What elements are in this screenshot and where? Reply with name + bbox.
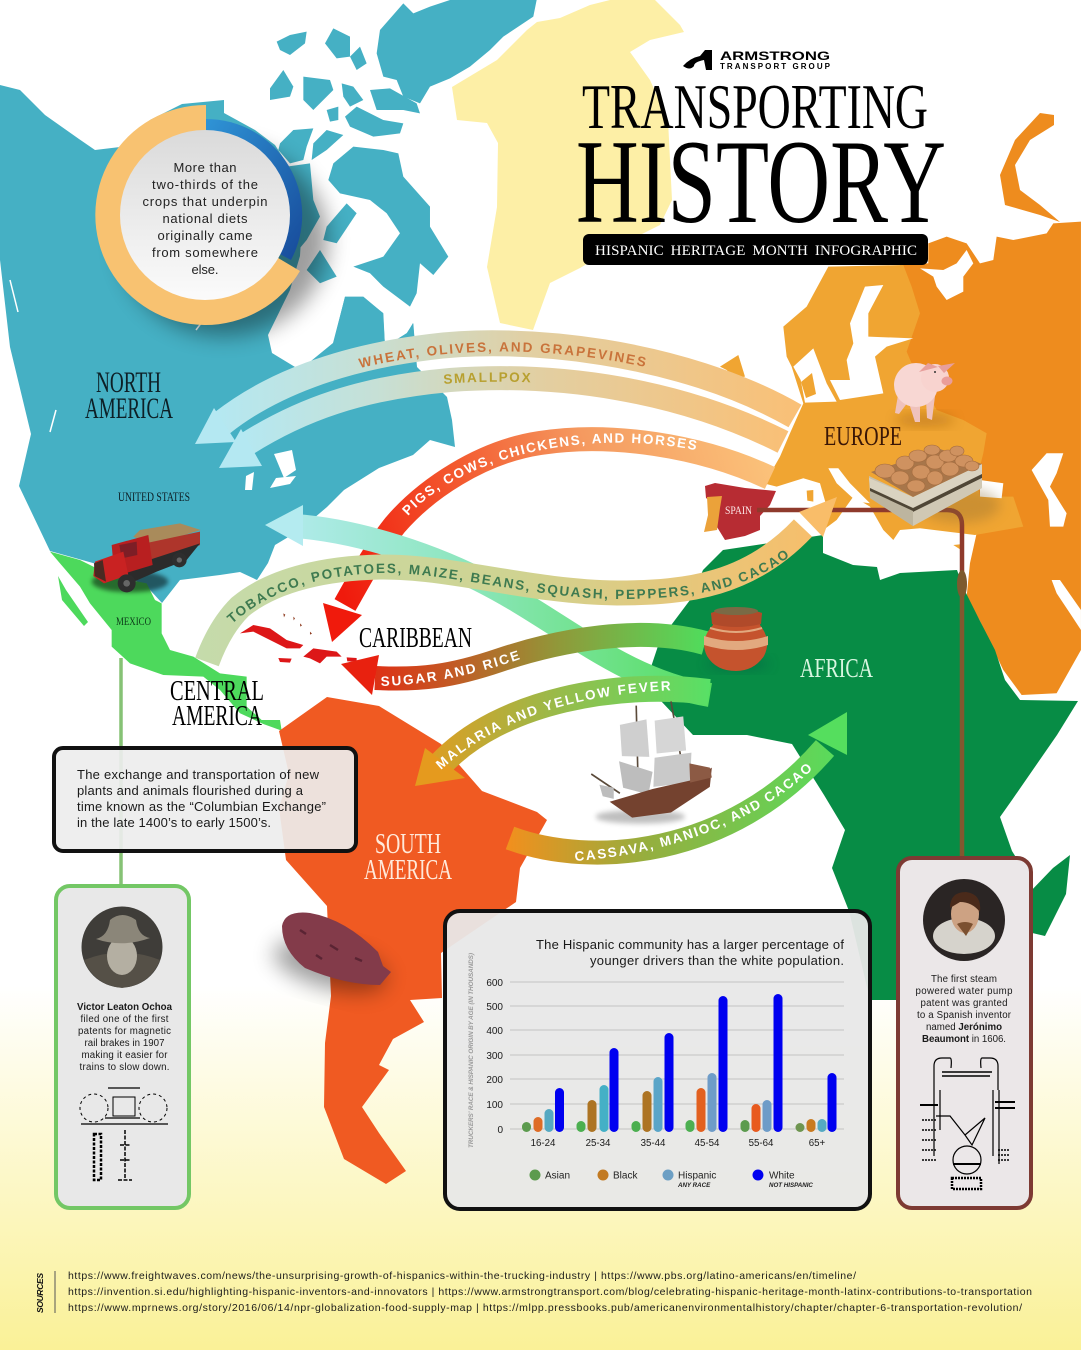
map: Mexico and Central America	[50, 552, 282, 731]
arrow: cassava, manioc and cacao	[506, 712, 847, 865]
arrow: sugar and rice: SUGAR AND RICE	[381, 650, 520, 686]
map: Caribbean islands	[240, 613, 357, 663]
bio text: powered water pump	[916, 986, 1012, 997]
connector: Mexico to Ochoa card	[119, 658, 123, 886]
bar chart: 35-44	[641, 1138, 666, 1149]
illustration: galleon ship	[591, 701, 712, 824]
arrow: pigs, cows, chickens and horses: PIGS, COWS, CHICKENS, AND HORSES	[402, 433, 696, 516]
map: Spain and Portugal	[704, 483, 776, 540]
sources: https://www.freightwaves.com/news/the-unsurprising-growth-of-hispanics-within-the-trucking-industry | https://www.pbs.org/latino-americans/en/timeline/	[68, 1270, 856, 1282]
map: South America	[279, 697, 547, 1184]
panel: Columbian Exchange: plants and animals flourished during a	[77, 783, 304, 798]
callout: two-thirds crops donut: More than	[174, 160, 236, 175]
callout: two-thirds crops donut: originally came	[158, 228, 252, 243]
callout: two-thirds crops donut: two-thirds of the	[152, 177, 258, 192]
logo: Armstrong Transport Group	[683, 50, 831, 71]
panel: Columbian Exchange: in the late 1400’s to early 1500’s.	[77, 815, 271, 830]
label: Spain: SPAIN	[725, 503, 752, 517]
bio text: Victor Leaton Ochoa	[77, 1002, 173, 1013]
callout: two-thirds crops donut: national diets	[162, 211, 248, 226]
chart legend: ANY RACE	[677, 1182, 711, 1189]
portrait: Victor Leaton Ochoa	[82, 906, 162, 988]
label: Europe: EUROPE	[824, 421, 902, 451]
map: Europe	[720, 265, 1023, 549]
chart heading: younger drivers than the white population.	[590, 953, 844, 968]
bio text: Beaumont in 1606.	[922, 1034, 1006, 1045]
label: Mexico: MEXICO	[116, 614, 151, 628]
illustration: cacao pod	[268, 913, 392, 1002]
bar chart: 600	[486, 978, 503, 989]
connector: Spain to Beaumont card	[757, 510, 967, 857]
arrow: malaria and yellow fever	[415, 676, 711, 786]
arrow: sugar and rice	[341, 622, 708, 695]
chart heading	[536, 937, 844, 968]
panel: trucker demographics chart	[445, 911, 870, 1209]
bio text: filed one of the first	[80, 1014, 169, 1025]
chart legend	[530, 1170, 813, 1189]
callout: two-thirds crops donut: crops that underpin	[142, 194, 268, 209]
sources	[35, 1270, 1032, 1314]
panel: Columbian Exchange	[54, 748, 356, 851]
sources: https://invention.si.edu/highlighting-hispanic-inventors-and-innovators | https://www.armstrongtransport.com/blog/celebrating-hispanic-heritage-month-latinx-contributions-to-transportation	[68, 1286, 1032, 1298]
axis title: TRUCKERS’ RACE & HISPANIC ORIGIN BY AGE (IN THOUSANDS)	[468, 953, 475, 1148]
chart heading: The Hispanic community has a larger percentage of	[536, 937, 844, 952]
title: HISTORY	[576, 115, 946, 248]
callout: two-thirds crops donut: else.	[192, 262, 218, 277]
map: Baltic and inland seas	[793, 250, 1081, 630]
patent drawing: steam water pump	[920, 1058, 1015, 1189]
arrow: pigs, cows, chickens and horses	[323, 427, 775, 642]
map: Madagascar	[1028, 855, 1070, 936]
label: South America: AMERICA	[364, 855, 453, 886]
arrow: wheat, olives and grapevines	[195, 330, 802, 444]
bar chart: 300	[486, 1051, 503, 1062]
label: North America	[85, 366, 173, 425]
bio text	[916, 974, 1012, 1045]
subtitle banner	[583, 234, 928, 265]
bar chart: 200	[486, 1075, 503, 1086]
illustration: clay pot	[704, 607, 770, 671]
label: Central America	[170, 676, 264, 732]
subtitle banner: HISPANIC HERITAGE MONTH INFOGRAPHIC	[595, 243, 917, 259]
bio text: making it easier for	[82, 1050, 168, 1061]
arrow: tobacco, potatoes, maize, beans, squash, peppers and cacao	[195, 497, 837, 666]
bar chart: 0	[497, 1125, 503, 1136]
bar chart: 400	[486, 1026, 503, 1037]
label: Africa: AFRICA	[800, 653, 873, 683]
bio text: patents for magnetic	[78, 1026, 171, 1037]
logo: Armstrong Transport Group: ARMSTRONG	[720, 51, 830, 63]
arrow: smallpox: SMALLPOX	[444, 372, 530, 384]
arrow: smallpox	[219, 366, 788, 468]
arrow: wheat, olives and grapevines: WHEAT, OLIVES, AND GRAPEVINES	[358, 342, 646, 368]
map: Africa	[650, 535, 1078, 1000]
title	[576, 71, 946, 248]
callout: two-thirds crops donut: from somewhere	[152, 245, 258, 260]
illustration: red truck	[92, 523, 201, 592]
title: TRANSPORTING	[582, 71, 928, 142]
bio text: patent was granted	[920, 998, 1008, 1009]
panel: Victor Leaton Ochoa	[56, 886, 189, 1208]
bio text: named Jerónimo	[926, 1022, 1002, 1033]
arrow: tobacco, potatoes, maize, beans, squash, peppers and cacao: TOBACCO, POTATOES, MAIZE, BEANS, SQUASH, PEPPERS, AND CACAO	[226, 550, 788, 622]
chart legend: Hispanic	[678, 1170, 716, 1182]
region labels	[85, 366, 902, 886]
chart legend: NOT HISPANIC	[769, 1182, 813, 1189]
bar chart: 45-54	[695, 1138, 720, 1149]
patent drawing: magnetic rail brake	[80, 1088, 168, 1180]
label: Central America: AMERICA	[172, 701, 263, 732]
arrow: cassava, manioc and cacao: CASSAVA, MANIOC, AND CACAO	[575, 764, 811, 861]
map: North America	[0, 0, 537, 603]
bio text: trains to slow down.	[80, 1062, 170, 1073]
callout: two-thirds crops donut	[95, 105, 328, 336]
sources: SOURCES	[35, 1273, 45, 1313]
bar chart: 500	[486, 1002, 503, 1013]
bio text	[77, 1002, 173, 1073]
bar chart: 25-34	[586, 1138, 611, 1149]
bar chart: 16-24	[531, 1138, 556, 1149]
label: United States: UNITED STATES	[118, 489, 190, 504]
chart legend: White	[769, 1170, 795, 1182]
map: Greenland	[452, 0, 684, 330]
label: Caribbean: CARIBBEAN	[359, 623, 472, 654]
bio text: The first steam	[931, 974, 997, 985]
bar chart: 55-64	[749, 1138, 774, 1149]
bio text: rail brakes in 1907	[84, 1038, 164, 1049]
bar chart	[486, 978, 844, 1149]
illustration: pig	[894, 363, 955, 426]
bar chart: 100	[486, 1100, 503, 1111]
illustration: crate of potatoes	[869, 445, 1000, 526]
map: Russia and Middle East	[900, 113, 1081, 695]
label: South America	[364, 829, 453, 886]
sources: https://www.mprnews.org/story/2016/06/14/npr-globalization-food-supply-map | https://mlpp.pressbooks.pub/americanenvironmentalhistory/chapter/chapter-6-transportation-revolution/	[68, 1302, 1022, 1314]
label: South America: SOUTH	[375, 829, 441, 860]
panel: Jeronimo Beaumont	[898, 858, 1031, 1208]
panel: Columbian Exchange: The exchange and transportation of new	[77, 767, 320, 782]
bio text: to a Spanish inventor	[917, 1010, 1012, 1021]
portrait: Jeronimo Beaumont	[923, 879, 1005, 961]
label: Central America: CENTRAL	[170, 676, 264, 707]
chart legend: Black	[613, 1170, 638, 1182]
bar chart: 65+	[809, 1138, 826, 1149]
arrow: long teal arrow from Africa to North America	[265, 505, 710, 695]
arrow: malaria and yellow fever: MALARIA AND YELLOW FEVER	[436, 681, 670, 770]
map: Europe denmark	[801, 373, 816, 398]
label: North America: NORTH	[96, 366, 161, 399]
chart legend: Asian	[545, 1170, 570, 1182]
logo: Armstrong Transport Group: TRANSPORT GROUP	[720, 62, 831, 71]
panel: Columbian Exchange: time known as the “Columbian Exchange”	[77, 799, 326, 814]
label: North America: AMERICA	[85, 392, 173, 425]
